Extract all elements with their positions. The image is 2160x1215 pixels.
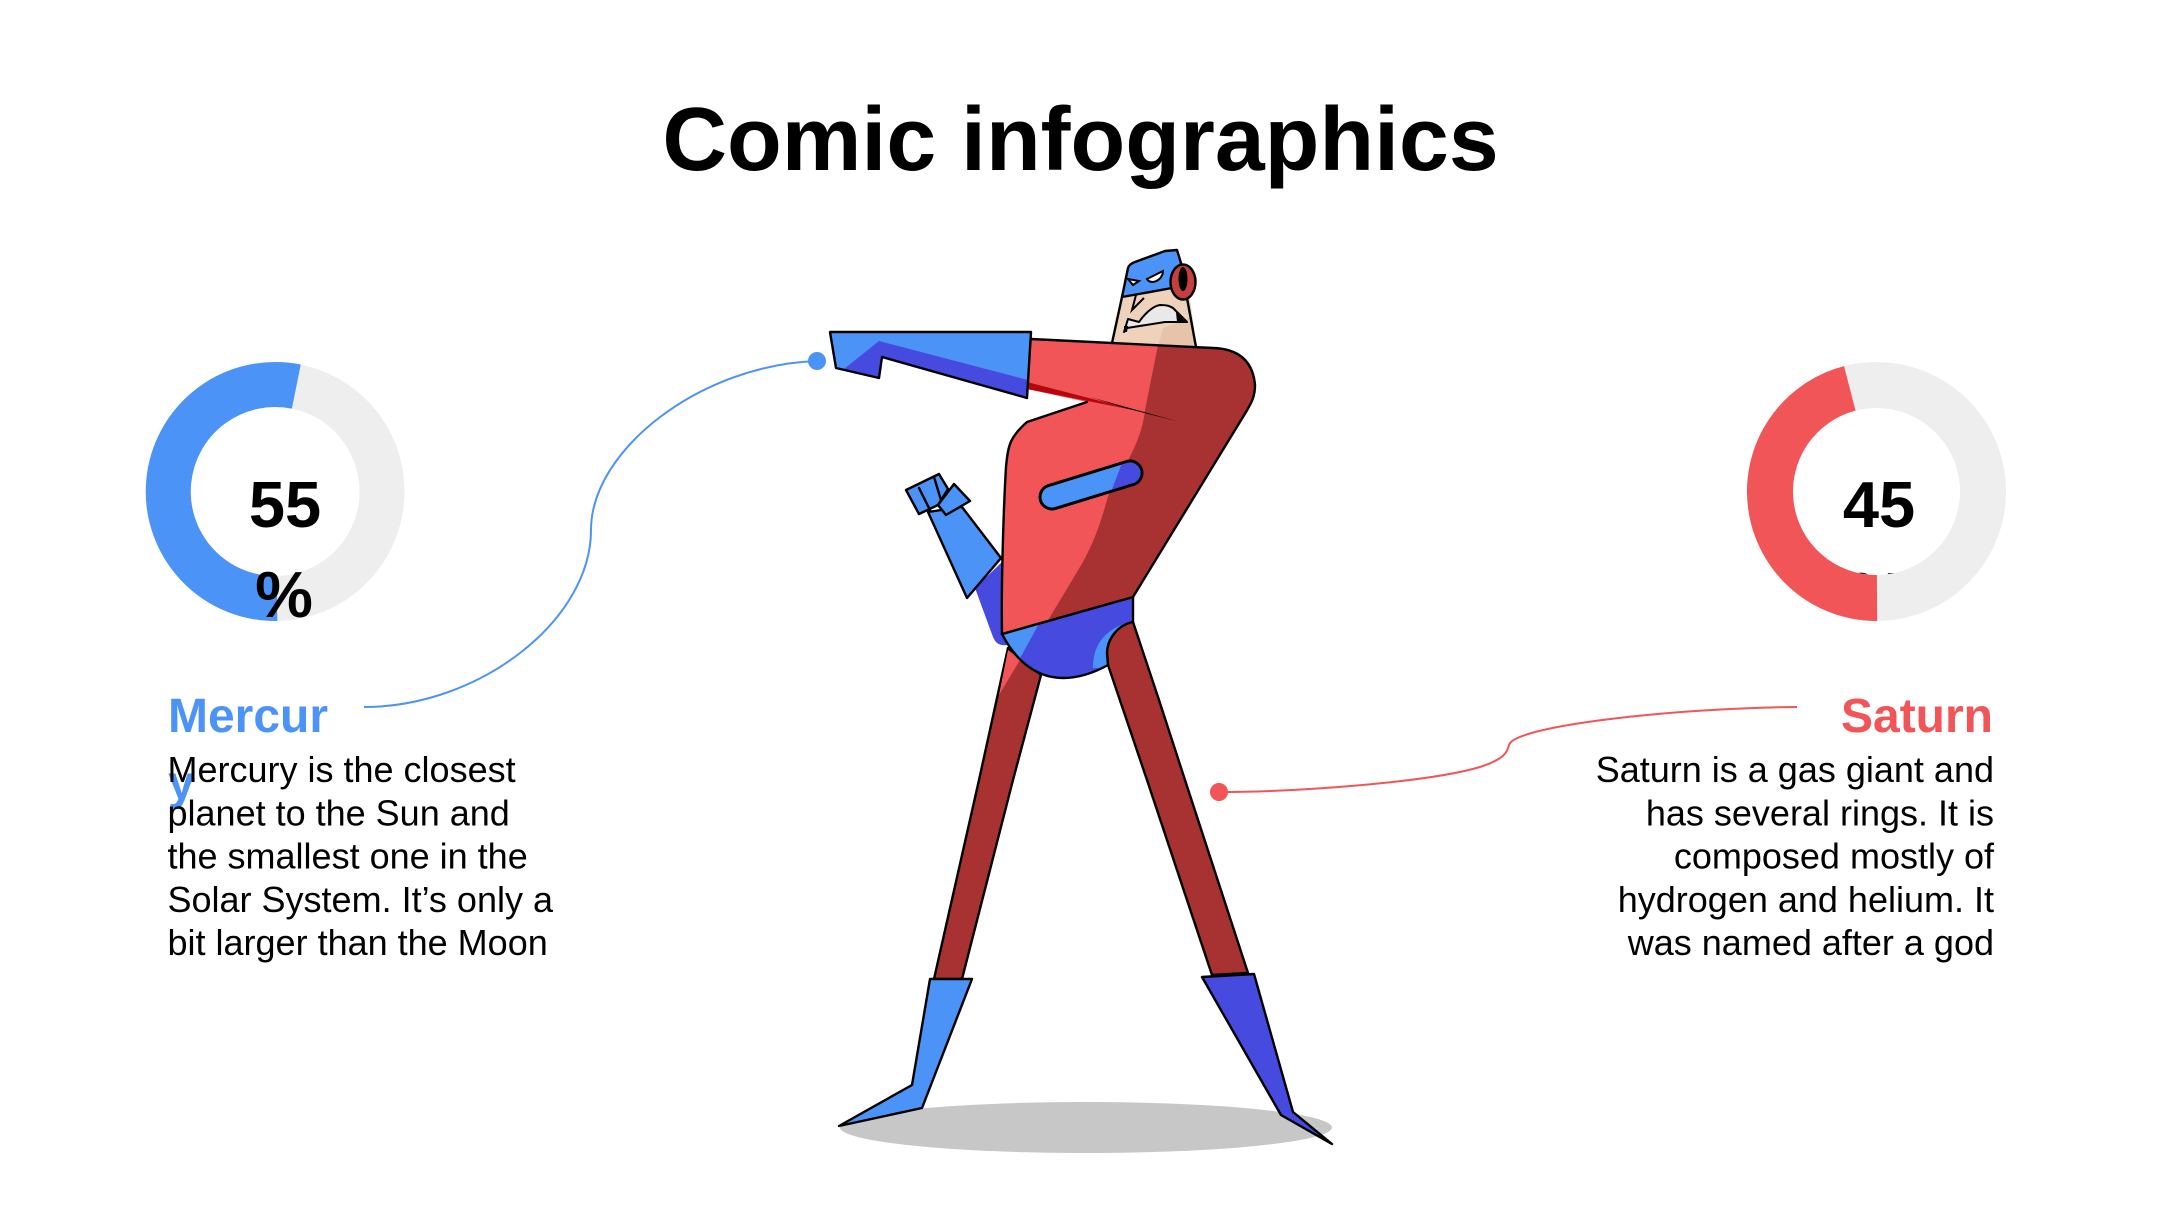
heading: Mercury: Mercur: [168, 690, 328, 743]
title: Comic infographics: [662, 89, 1499, 189]
head: [1112, 250, 1197, 350]
text block: Saturn description: composed mostly of: [1674, 836, 1995, 876]
forearm and fist: [906, 474, 1001, 598]
text block: Saturn description: has several rings. It is: [1646, 792, 1994, 833]
text block: Mercury description: [168, 749, 554, 963]
donut chart: Saturn 45%: 45: [1843, 468, 1915, 541]
text block: Mercury description: Mercury is the closest: [168, 749, 516, 790]
outstretched blue arm: [830, 332, 1031, 398]
left boot: [839, 979, 972, 1126]
text block: Mercury description: the smallest one in the: [168, 836, 528, 876]
donut chart: Mercury 55%: %: [255, 558, 313, 631]
chest emblem: [1052, 473, 1130, 497]
ground shadow: [840, 1102, 1332, 1153]
text block: Saturn description: was named after a god: [1627, 922, 1994, 963]
connector: Saturn callout: [1210, 707, 1797, 801]
briefs: [1000, 597, 1133, 678]
torso and shoulder: [1002, 339, 1260, 634]
donut chart: Mercury 55%: 55: [249, 468, 321, 541]
heading: Mercury: [168, 690, 328, 810]
illustration: comic superhero: [830, 250, 1332, 1153]
donut chart: Mercury 55%: [168, 384, 382, 631]
text block: Saturn description: hydrogen and helium. It: [1618, 879, 1994, 920]
left leg: [934, 648, 1041, 979]
right leg: [1107, 622, 1248, 975]
text block: Saturn description: Saturn is a gas giant and: [1596, 749, 1994, 790]
upper arm behind torso: [975, 562, 1008, 645]
heading: Mercury: y: [168, 757, 195, 810]
heading: Saturn: Saturn: [1841, 690, 1993, 743]
text block: Mercury description: planet to the Sun and: [168, 792, 510, 833]
donut chart: Saturn 45%: %: [1848, 559, 1906, 632]
right boot: [1202, 974, 1332, 1144]
text block: Saturn description: [1596, 749, 1995, 963]
connector: Mercury callout: [364, 352, 826, 707]
donut chart: Saturn 45%: [1770, 385, 1983, 632]
text block: Mercury description: Solar System. It’s only a: [168, 879, 554, 920]
text block: Mercury description: bit larger than the Moon: [168, 922, 548, 963]
